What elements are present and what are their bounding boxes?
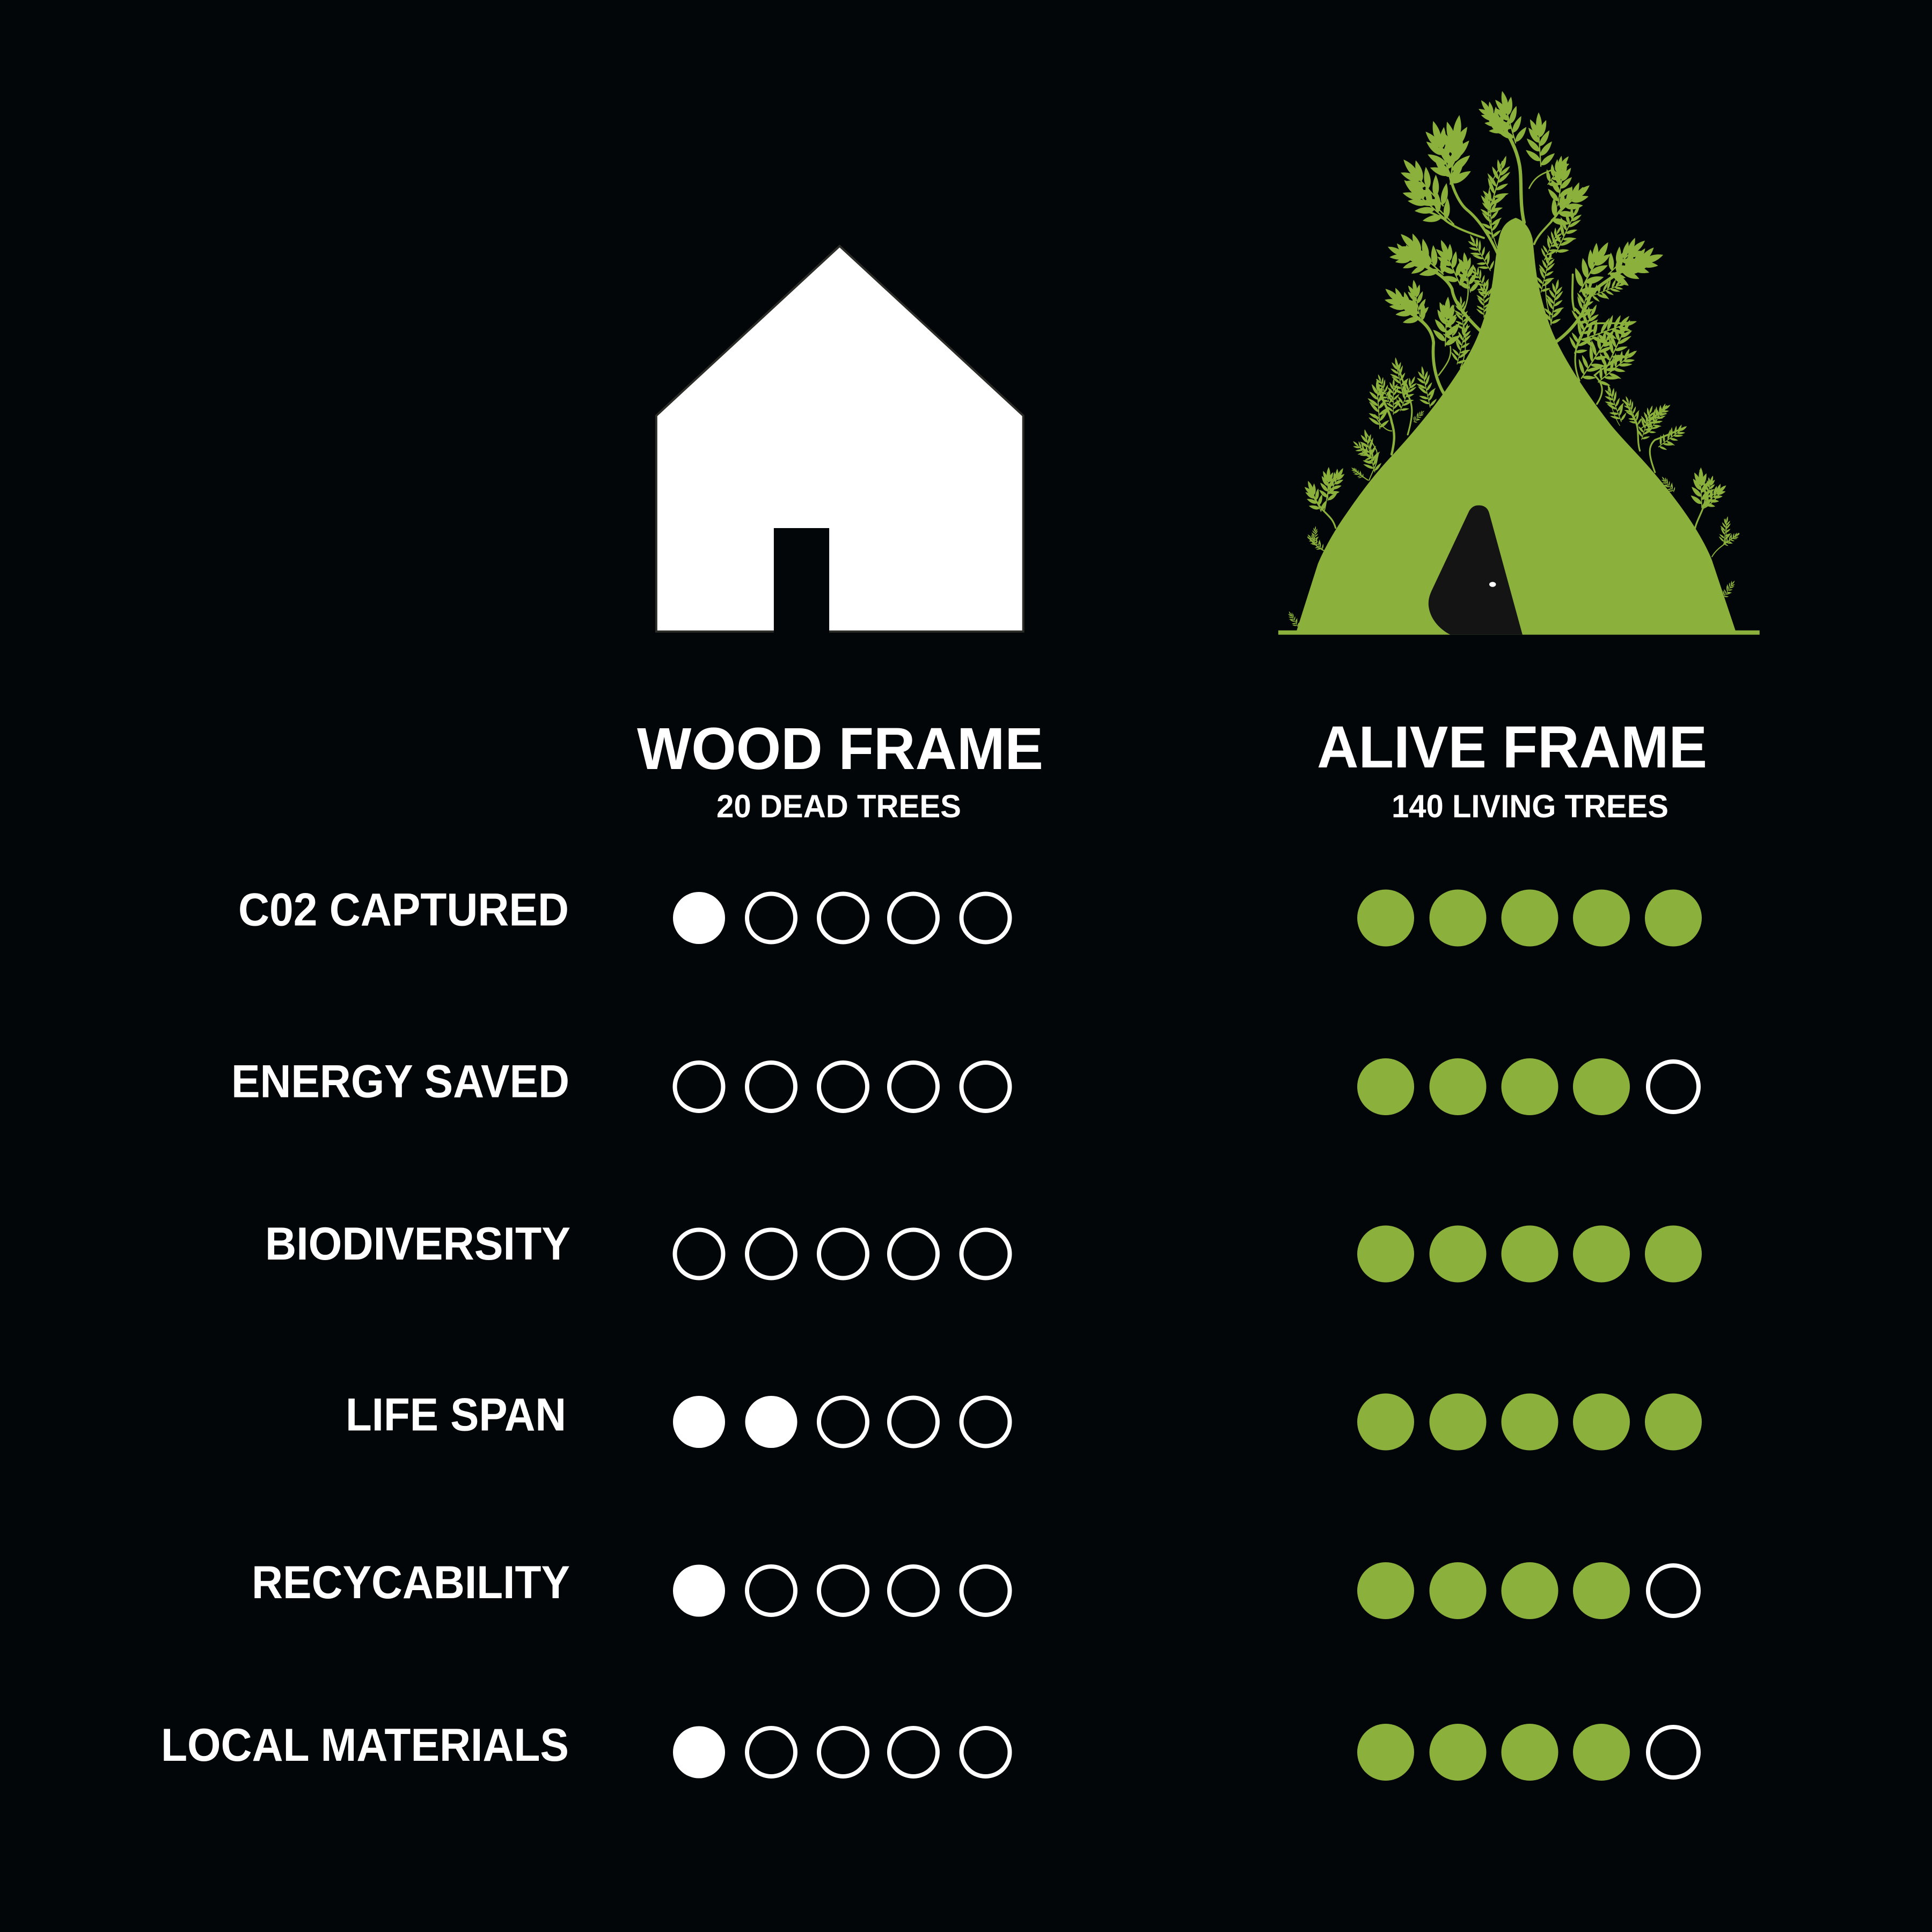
door	[1429, 506, 1523, 635]
rating: wood frame recycability 1 of 5	[673, 1565, 1010, 1616]
label: biodiversity: BIODIVERSITY	[265, 1218, 570, 1270]
label: local materials: LOCAL MATERIALS	[161, 1719, 569, 1771]
label: life span: LIFE SPAN	[346, 1389, 566, 1441]
rating: alive frame energy saved 4 of 5	[1357, 1058, 1699, 1115]
rating: wood frame biodiversity 0 of 5	[675, 1230, 1010, 1278]
subheading: 20 dead trees: 20 DEAD TREES	[716, 788, 961, 824]
heading: alive frame: ALIVE FRAME	[1317, 714, 1707, 780]
foliage leaf sprigs	[1285, 86, 1742, 629]
rating: alive frame biodiversity 5 of 5	[1357, 1226, 1702, 1283]
icon: wood frame house	[656, 246, 1023, 634]
rating: wood frame energy saved 0 of 5	[675, 1063, 1010, 1111]
subheading: 140 living trees: 140 LIVING TREES	[1392, 788, 1668, 824]
label: recycability: RECYCABILITY	[252, 1557, 570, 1608]
rating: alive frame life span 5 of 5	[1357, 1393, 1702, 1450]
ground line	[1278, 631, 1760, 635]
rating: wood frame local materials 1 of 5	[673, 1726, 1010, 1779]
icon: alive frame living tree house	[1278, 86, 1760, 635]
rating: alive frame recycability 4 of 5	[1357, 1562, 1699, 1619]
heading: wood frame: WOOD FRAME	[637, 716, 1043, 782]
rating: alive frame local materials 4 of 5	[1357, 1724, 1699, 1781]
label: energy saved: ENERGY SAVED	[231, 1056, 569, 1108]
door knob	[1489, 582, 1496, 587]
label: CO2 captured: C02 CAPTURED	[238, 884, 569, 935]
rating: wood frame CO2 captured 1 of 5	[673, 892, 1010, 944]
rating: wood frame life span 2 of 5	[673, 1396, 1010, 1448]
tent-shaped living body	[1296, 218, 1736, 633]
rating: alive frame CO2 captured 5 of 5	[1357, 890, 1702, 947]
foliage stems	[1308, 116, 1739, 557]
